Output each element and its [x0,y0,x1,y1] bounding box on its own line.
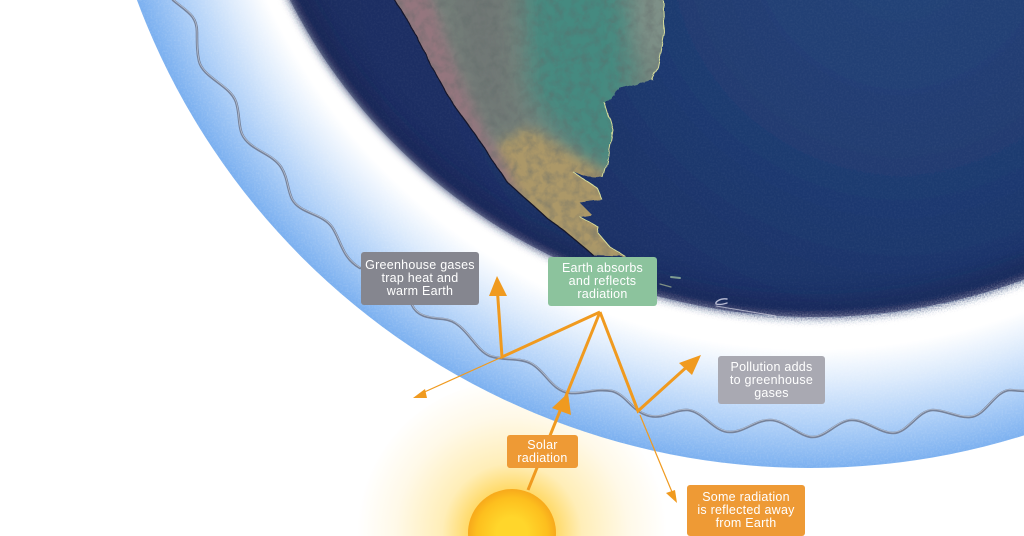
label: Earth absorbs: and reflects [569,274,636,288]
South America landmass [394,0,665,257]
islands [660,277,776,316]
label: pollution: to greenhouse [730,372,813,386]
arrow: reflected right [600,312,701,411]
label: pollution [718,356,825,404]
arrow: thin escape left [413,357,502,398]
label: greenhouse gases: warm Earth [387,284,453,298]
label: some radiation reflected [687,485,805,536]
label: some radiation reflected: Some radiation [702,490,790,504]
arrow: solar radiation in [528,312,600,490]
atmosphere band [137,0,1024,468]
arrow: thin reflected away [640,415,677,503]
sun [468,489,556,536]
label: solar radiation [507,435,578,468]
label: Earth absorbs [548,257,657,306]
label: solar radiation: radiation [517,450,568,464]
label: Earth absorbs: radiation [577,287,628,301]
label: pollution: gases [754,386,789,400]
label: solar radiation: Solar [527,438,558,452]
sun glow [357,381,667,536]
arrow: reflected to greenhouse layer and trapped [489,276,600,357]
Earth globe [282,0,1024,326]
label: pollution: Pollution adds [730,360,813,374]
label: greenhouse gases [361,252,479,305]
label: Earth absorbs: Earth absorbs [562,261,643,275]
label: greenhouse gases: Greenhouse gases [365,258,475,272]
label: some radiation reflected: from Earth [716,516,776,530]
label: some radiation reflected: is reflected away [697,503,795,517]
label: greenhouse gases: trap heat and [382,271,458,285]
greenhouse gas layer: wavy line [173,0,1024,437]
